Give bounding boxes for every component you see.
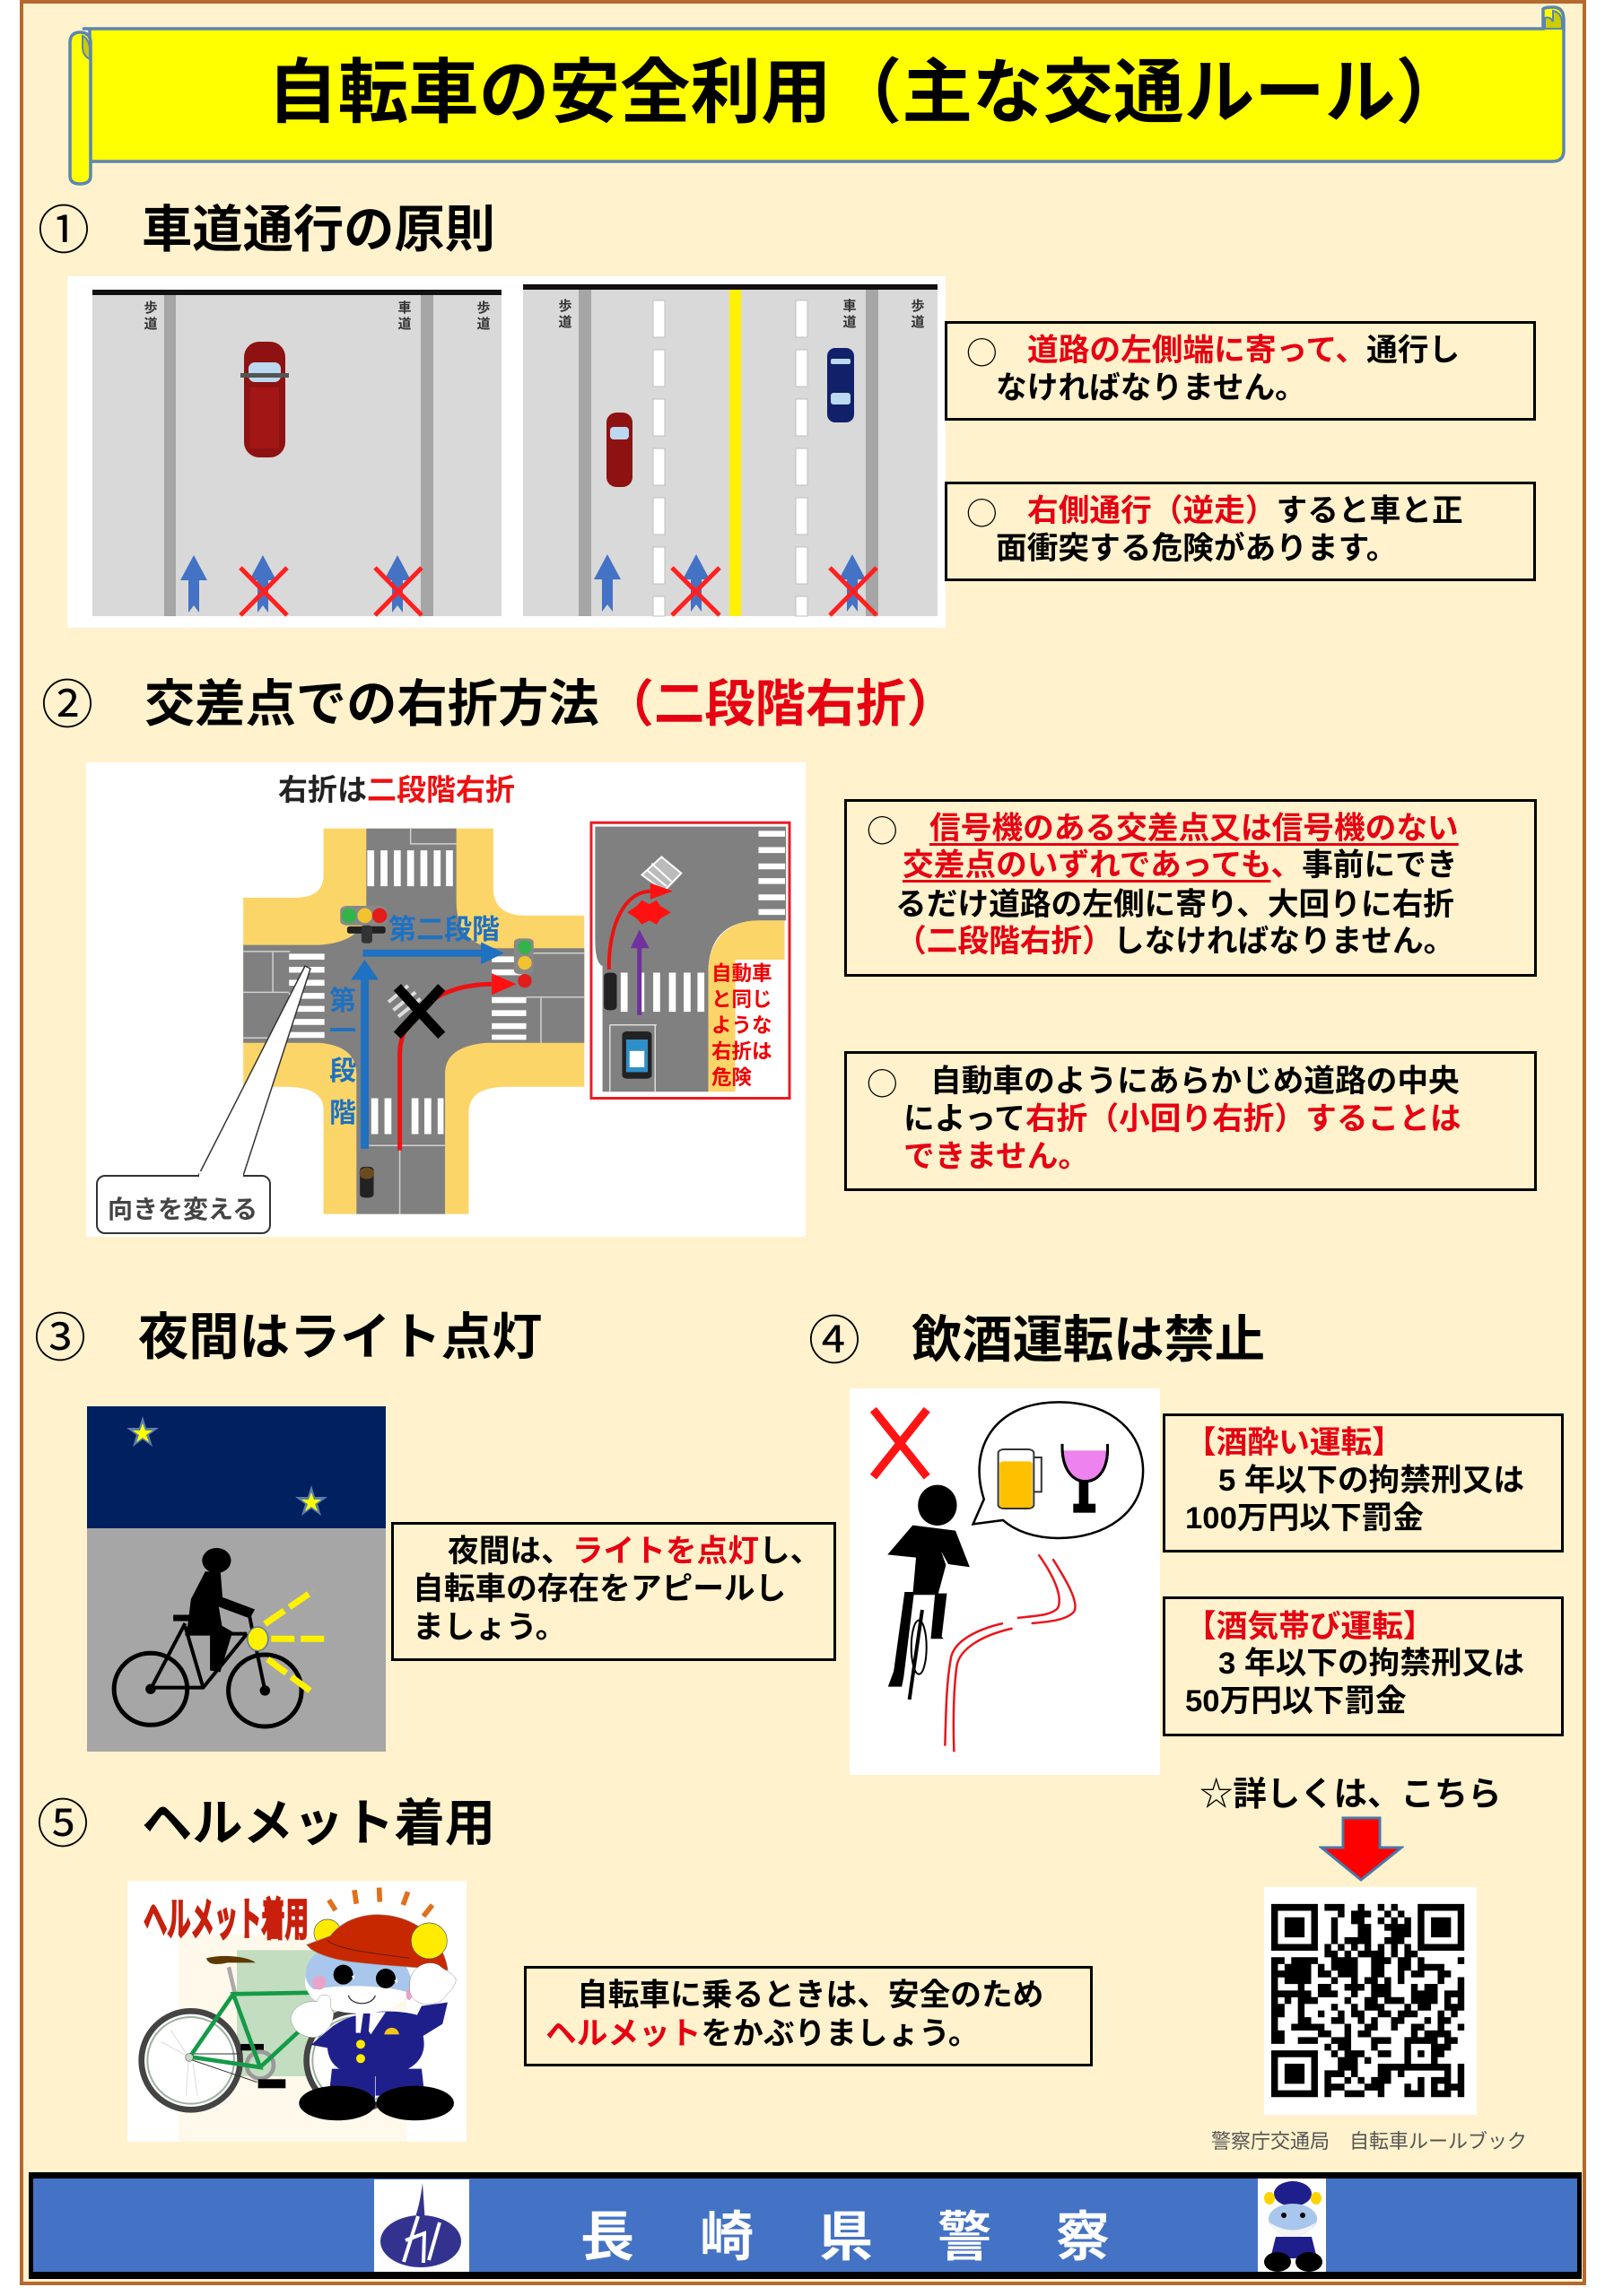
- footer text: 崎: [700, 2207, 754, 2267]
- text box: turn on light: 自転車の存在をアピールし: [413, 1572, 786, 1606]
- inset warning text: 危険: [711, 1066, 753, 1089]
- text box: no small-radius turn: 自動車のようにあらかじめ道路の中央: [930, 1065, 1460, 1099]
- text box: turn on light: [391, 1522, 836, 1661]
- more details label: ☆詳しくは、こちら: [1199, 1767, 1502, 1815]
- inset warning text: と同じ: [711, 988, 772, 1011]
- footer text: 察: [1056, 2207, 1110, 2267]
- title: 自転車の安全利用（主な交通ルール）: [267, 53, 1466, 132]
- inset warning text: [711, 962, 772, 1089]
- title scroll banner: [68, 5, 1566, 186]
- icon: footer police mascot: [1258, 2179, 1326, 2272]
- callout: change direction: 向きを変える: [108, 1196, 257, 1223]
- inset warning text: 自動車: [711, 962, 772, 985]
- heading 4: [808, 1299, 1265, 1374]
- footer text: 警: [938, 2207, 991, 2267]
- inset: dangerous car-style turn: [591, 822, 789, 1099]
- figure: helmet mascot with bicycle: ヘルメット着用: [144, 1894, 309, 1944]
- label: first stage: 一: [329, 1017, 356, 1047]
- figure: road diagrams: 歩: [558, 298, 572, 314]
- figure: road diagrams: 道: [144, 317, 158, 332]
- text box: wrong way danger: ○: [966, 489, 998, 534]
- text box: drunk driving penalty: 【酒酔い運転】: [1185, 1426, 1403, 1460]
- text box: wrong way danger: 右側通行（逆走）すると車と正: [1027, 494, 1463, 528]
- heading 1: ①: [38, 188, 90, 264]
- text: 車道通行の原則: [142, 201, 495, 257]
- text box: no small-radius turn: ○: [867, 1059, 898, 1104]
- heading 4: ④: [808, 1299, 860, 1374]
- inset warning text: ような: [711, 1014, 772, 1037]
- text: 交差点での右折方法（二段階右折）: [144, 675, 957, 732]
- text box: keep left: [945, 321, 1536, 421]
- arrow: down to QR: [1319, 1817, 1404, 1882]
- text box: turn on light: ましょう。: [413, 1611, 566, 1645]
- figure: no drunk cycling: [850, 1388, 1160, 1775]
- text box: drunk driving penalty: [1163, 1413, 1564, 1552]
- label: first stage: [329, 987, 356, 1128]
- footer text: 県: [819, 2207, 873, 2267]
- figure: road diagrams: 道: [476, 317, 491, 332]
- text box: two-stage turn rule: [844, 799, 1537, 977]
- text box: turn on light: 夜間は、ライトを点灯し、: [448, 1535, 821, 1569]
- text: 飲酒運転は禁止: [912, 1311, 1265, 1368]
- text box: two-stage turn rule: 信号機のある交差点又は信号機のない: [929, 812, 1459, 846]
- text box: two-stage turn rule: るだけ道路の左側に寄り、大回りに右折: [895, 888, 1454, 922]
- text box: alcohol influence penalty: 【酒気帯び運転】: [1185, 1610, 1435, 1644]
- QR code: [1264, 1887, 1477, 2115]
- text box: wrong way danger: [945, 482, 1536, 581]
- text box: two-stage turn rule: ○: [867, 806, 898, 851]
- figure: intersection two-stage right turn: [86, 762, 806, 1237]
- image caption: 右折は二段階右折: [278, 773, 515, 806]
- text box: no small-radius turn: できません。: [903, 1140, 1089, 1174]
- label: second stage: 第二段階: [388, 914, 500, 945]
- heading 5: [37, 1782, 495, 1857]
- text box: two-stage turn rule: （二段階右折）しなければなりません。: [895, 925, 1454, 959]
- figure: road diagrams: 歩: [911, 298, 925, 314]
- text box: wear a helmet: 自転車に乗るときは、安全のため: [577, 1979, 1043, 2013]
- text box: wear a helmet: [524, 1966, 1093, 2066]
- text box: alcohol influence penalty: [1163, 1596, 1564, 1736]
- figure: road diagrams: 道: [558, 315, 572, 330]
- text box: alcohol influence penalty: 3 年以下の拘禁刑又は: [1218, 1647, 1524, 1681]
- text box: wrong way danger: 面衝突する危険があります。: [996, 532, 1397, 566]
- text box: keep left: ○: [966, 328, 998, 373]
- text: 夜間はライト点灯: [138, 1309, 542, 1365]
- figure: road diagrams: 車: [397, 300, 412, 316]
- label: first stage: 段: [329, 1057, 356, 1086]
- text box: no small-radius turn: [844, 1051, 1537, 1191]
- callout: change direction: [97, 966, 310, 1233]
- text box: drunk driving penalty: 100万円以下罰金: [1185, 1501, 1424, 1535]
- text box: no small-radius turn: によって右折（小回り右折）することは: [903, 1102, 1461, 1136]
- figure: road diagrams: 車: [842, 299, 857, 314]
- heading 3: [34, 1296, 542, 1371]
- heading 3: ③: [34, 1296, 86, 1371]
- footer bar: [29, 2172, 1582, 2279]
- heading 1: [38, 188, 495, 264]
- figure: night cyclist with light: [87, 1406, 386, 1752]
- inset warning text: 右折は: [711, 1040, 772, 1063]
- text box: wear a helmet: ヘルメットをかぶりましょう。: [545, 2017, 980, 2051]
- heading 2: ②: [41, 663, 93, 738]
- QR caption: 警察庁交通局 自転車ルールブック: [1211, 2130, 1527, 2152]
- figure: road diagrams: 道: [842, 315, 857, 330]
- text box: alcohol influence penalty: 50万円以下罰金: [1185, 1684, 1407, 1718]
- label: first stage: 階: [329, 1099, 356, 1128]
- footer text: [580, 2207, 1110, 2267]
- text box: drunk driving penalty: 5 年以下の拘禁刑又は: [1218, 1464, 1524, 1498]
- figure: helmet mascot with bicycle: [127, 1881, 467, 2142]
- heading 5: ⑤: [37, 1782, 89, 1857]
- footer text: 長: [580, 2207, 634, 2267]
- label: first stage: 第: [329, 987, 356, 1016]
- text box: two-stage turn rule: 交差点のいずれであっても、事前にでき: [903, 848, 1458, 883]
- figure: road diagrams: 道: [397, 317, 412, 332]
- figure: road diagrams: 歩: [144, 300, 158, 316]
- text: ヘルメット着用: [142, 1795, 495, 1851]
- text box: keep left: 道路の左側端に寄って、通行し: [1027, 334, 1460, 368]
- figure: road diagrams: 歩: [476, 300, 491, 316]
- heading 2: [41, 663, 957, 738]
- figure: road diagrams: [67, 276, 946, 628]
- figure: road diagrams: 道: [911, 315, 925, 330]
- main intersection diagram: [243, 829, 584, 1214]
- text box: keep left: なければなりません。: [996, 371, 1306, 405]
- icon: police logo: [374, 2179, 469, 2272]
